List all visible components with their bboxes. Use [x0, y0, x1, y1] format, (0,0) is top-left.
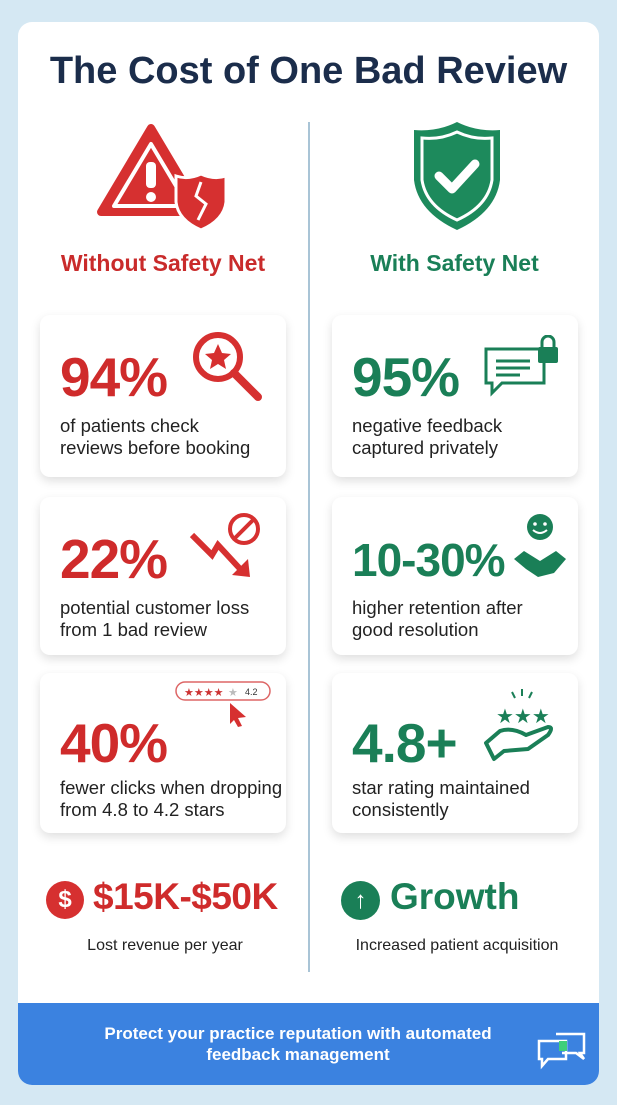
card: 40%: 40%: [60, 712, 167, 774]
card: 4.8+: 4.8+: [352, 712, 457, 774]
card: 22%: [40, 497, 286, 655]
icon: chat bubbles: [538, 1032, 586, 1070]
card: 94%: of patients check: [60, 415, 199, 436]
icon: rating pill with cursor: [175, 681, 271, 727]
card: 10-30%: good resolution: [352, 619, 479, 640]
card: 22%: potential customer loss: [60, 597, 249, 618]
icon: rating pill with cursor: ★: [228, 686, 238, 699]
card: 95%: captured privately: [352, 437, 498, 458]
card: 95%: negative feedback: [352, 415, 502, 436]
card: 40%: [40, 673, 286, 833]
card: 40%: from 4.8 to 4.2 stars: [60, 799, 225, 820]
card: 22%: 22%: [60, 528, 167, 590]
card: 94%: reviews before booking: [60, 437, 250, 458]
icon: dollar circle: [46, 881, 84, 919]
card: 4.8+: consistently: [352, 799, 449, 820]
stat: growth: [341, 876, 558, 954]
card: 10-30%: 10-30%: [352, 534, 505, 586]
card: 4.8+: [332, 673, 578, 833]
icon: magnifier star: [193, 332, 262, 401]
banner: Protect your practice reputation with automated feedback management: [104, 1024, 492, 1064]
icon: hand with stars: ★★★: [496, 704, 550, 728]
icon: chat lock: [484, 335, 558, 396]
stat: lost revenue: Lost revenue per year: [87, 937, 243, 954]
card: 22%: from 1 bad review: [60, 619, 207, 640]
icon: rating pill with cursor: ★★★★: [184, 686, 224, 699]
card: 94%: 94%: [60, 346, 167, 408]
title: The Cost of One Bad Review: [50, 50, 567, 92]
icon: smiley handshake: [514, 514, 566, 577]
icon: warning triangle with broken shield: [97, 124, 224, 228]
icon: hand with stars: [484, 689, 553, 762]
card: 40%: fewer clicks when dropping: [60, 777, 282, 798]
icon: green shield check: [414, 122, 500, 230]
icon: down arrow no-user: [190, 513, 260, 577]
heading: without safety net: Without Safety Net: [61, 250, 265, 276]
card: 4.8+: star rating maintained: [352, 777, 530, 798]
icon: rating pill with cursor: 4.2: [245, 687, 258, 697]
stat: growth: Growth: [390, 876, 519, 917]
banner: [18, 1003, 599, 1085]
icon: up arrow circle: [341, 881, 380, 920]
card: 95%: 95%: [352, 346, 459, 408]
card: 95%: [332, 315, 578, 477]
stat: growth: Increased patient acquisition: [356, 937, 558, 954]
stat: lost revenue: [46, 876, 278, 954]
stat: lost revenue: $15K-$50K: [93, 876, 278, 917]
card: 10-30%: higher retention after: [352, 597, 523, 618]
heading: with safety net: With Safety Net: [370, 250, 539, 276]
icon: dollar circle: $: [58, 886, 72, 913]
card: 94%: [40, 315, 286, 477]
card: 10-30%: [332, 497, 578, 655]
icon: up arrow circle: ↑: [354, 887, 366, 914]
